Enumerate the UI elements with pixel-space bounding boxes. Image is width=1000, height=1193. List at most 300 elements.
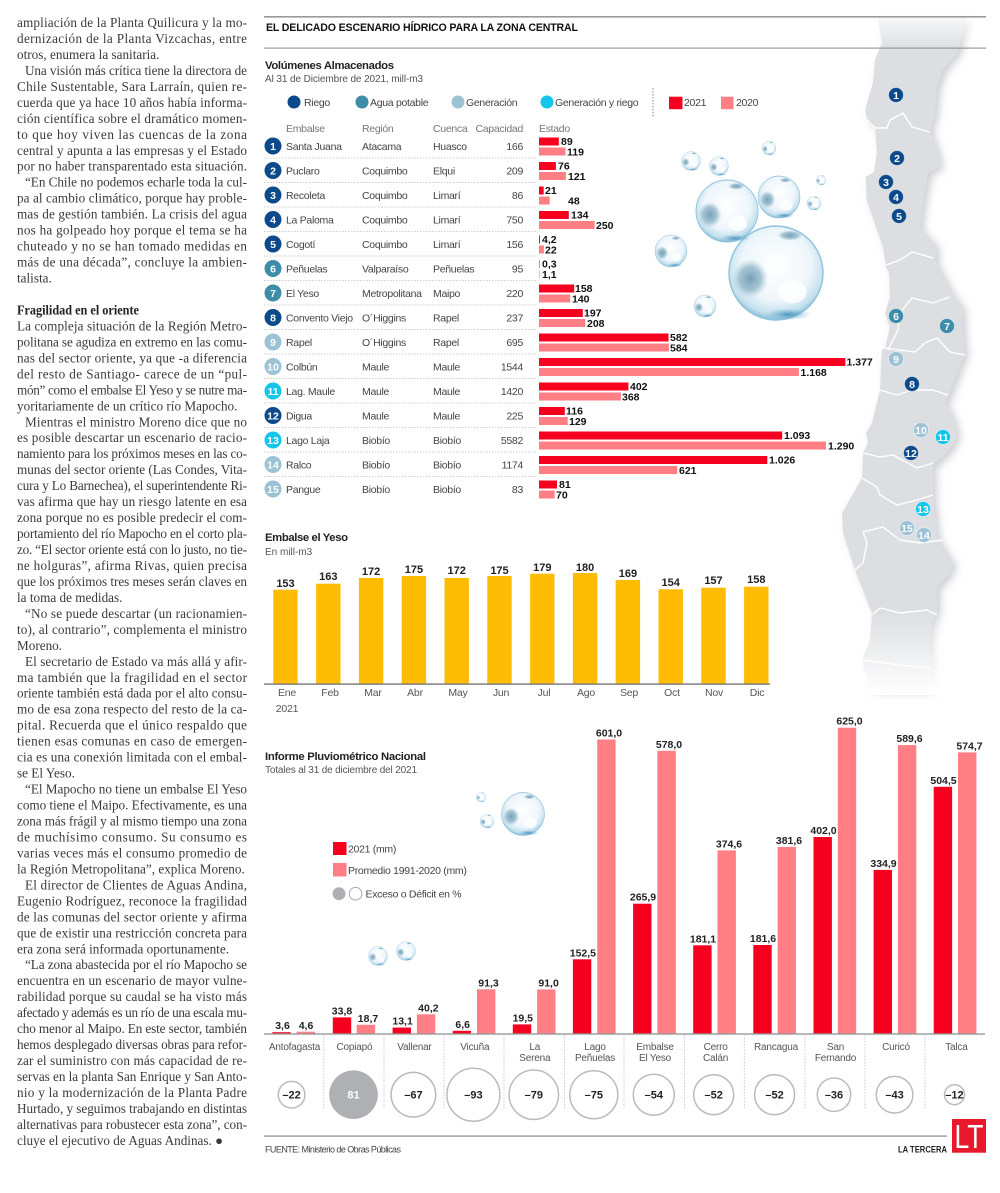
map pins: 10 (915, 425, 927, 437)
map pins: 6 (893, 311, 899, 323)
map pins (878, 88, 954, 542)
legend: reservoir use and year: Riego (304, 97, 330, 109)
values: 157 (704, 575, 723, 587)
station: Curicó: 589,6 (896, 733, 923, 745)
article text column: más de una década”, concluye la ambien- (17, 255, 247, 270)
table row: Recoleta (264, 185, 580, 208)
map silhouette (842, 18, 967, 690)
month labels: Ene (278, 687, 296, 699)
table row: Ralco: Biobío (362, 460, 390, 472)
station: Copiapó: 81 (347, 1090, 360, 1102)
table row: Cogotí: Coquimbo (362, 239, 408, 251)
legend: reservoir use and year: Generación (466, 97, 518, 109)
legend: rainfall (332, 842, 467, 900)
table row: La Paloma: 134 (571, 210, 589, 222)
station: Cerro Calán: 374,6 (716, 838, 742, 850)
table row: Pangue: 81 (559, 479, 571, 491)
table row: Recoleta: Limarí (433, 190, 461, 202)
month labels: Abr (407, 687, 424, 699)
article text column: mo de esa zona respecto del resto de la ca- (17, 702, 247, 717)
table row: Ralco (264, 454, 795, 477)
legend: rainfall: Exceso o Déficit en % (366, 888, 461, 900)
table row: Colbún: 1.168 (800, 367, 827, 379)
table row: El Yeso: 140 (572, 294, 590, 306)
table row: Lago Laja (264, 430, 854, 452)
article text column: encuentra en un escenario de mayor vulne- (17, 973, 247, 988)
table row: Lag. Maule: 368 (622, 392, 640, 404)
region borders (855, 113, 965, 668)
table row: Santa Juana (264, 136, 584, 158)
station: Copiapó: Copiapó (336, 1042, 373, 1053)
article text column: pa al cambio climático, porque hay proble- (17, 191, 247, 206)
article text column: cluye el ejecutivo de Aguas Andinas. ● (17, 1133, 223, 1148)
station: Lago Peñuelas: Lago (584, 1042, 606, 1053)
station: La Serena (509, 977, 559, 1119)
station: Lago Peñuelas: 601,0 (596, 728, 622, 740)
station: Curicó: 334,9 (870, 858, 897, 870)
values: 169 (619, 568, 637, 580)
table row: El Yeso: 7 (270, 288, 276, 300)
table row: La Paloma: La Paloma (286, 214, 334, 226)
station: Embalse El Yeso: Embalse (636, 1042, 674, 1053)
table row: La Paloma: Limarí (433, 214, 461, 226)
article text column: se El Yeso. (17, 766, 75, 781)
table row: Pangue: 83 (512, 484, 523, 496)
article text column: cia es una conexión limitada con el embal- (17, 750, 247, 765)
article text column: la Región Metropolitana”, explica Moreno. (17, 861, 245, 876)
station: Lago Peñuelas: –75 (585, 1090, 603, 1102)
map pins: 11 (937, 432, 949, 444)
table row: El Yeso: Maipo (433, 288, 461, 300)
article text column: por no haber transparentado esta situación. (17, 159, 247, 174)
heading: rainfall: Totales al 31 de diciembre del 2021 (265, 765, 417, 776)
table row: Colbún: 1.377 (846, 356, 873, 368)
table row: Cogotí (264, 234, 557, 256)
article text column: zar el suministro con más capacidad de re- (17, 1053, 247, 1068)
legend: reservoir use and year: Generación y riego (555, 97, 639, 109)
values: 172 (362, 566, 380, 578)
station: Talca: 574,7 (956, 740, 983, 752)
table row: Ralco: 14 (267, 460, 279, 472)
table row: Convento Viejo: 197 (584, 308, 602, 320)
table row: Recoleta: Recoleta (286, 190, 326, 202)
table row: Ralco: 621 (679, 465, 697, 477)
station: La Serena: La (529, 1042, 541, 1053)
station: Antofagasta (269, 1020, 321, 1108)
station: Cerro Calán: 181,1 (690, 933, 716, 945)
table row: Convento Viejo (264, 308, 605, 330)
table row: Peñuelas: Valparaíso (362, 264, 409, 276)
article text column: “En Chile no podemos echarle toda la cul- (25, 175, 247, 190)
station: Talca: Talca (945, 1042, 968, 1053)
station: Embalse El Yeso: El Yeso (639, 1053, 672, 1064)
values: 154 (662, 577, 681, 589)
article text column: “La zona abastecida por el río Mapocho se (25, 957, 247, 972)
station: Vicuña: 91,3 (478, 977, 499, 989)
table row: Colbún (264, 356, 873, 379)
table row: Convento Viejo: Convento Viejo (286, 312, 353, 324)
article text column: rabilidad porque su caudal se ha visto más (17, 989, 247, 1004)
heading: volumes: Volúmenes Almacenados (265, 60, 394, 72)
table row: Digua: 12 (267, 410, 279, 422)
article text column: El director de Clientes de Aguas Andina, (25, 877, 247, 892)
article text column: Eugenio Rodríguez, reconoce la fragilidad (17, 893, 247, 908)
station: Cerro Calán: Calán (703, 1053, 728, 1064)
panel: stored volumes (264, 60, 873, 502)
legend: rainfall: 2021 (mm) (348, 844, 396, 856)
article text column: dernización de la Planta Vizcachas, entre (17, 31, 247, 46)
values: 180 (576, 562, 594, 574)
table row: Rapel: 9 (270, 337, 276, 349)
station: Vallenar: Vallenar (397, 1042, 432, 1053)
table row: Peñuelas: 1,1 (542, 269, 557, 281)
table row: Ralco: 1174 (502, 460, 523, 472)
article text column: zona más frágil y al mismo tiempo una zona (17, 814, 247, 828)
map pins: 1 (893, 90, 899, 102)
month labels: Nov (705, 687, 724, 699)
heading: Embalse el Yeso: En mill-m3 (265, 547, 313, 558)
month labels: Dic (750, 687, 764, 699)
article text column: como tiene el Maipo. Efectivamente, es una (17, 798, 247, 812)
legend: reservoir use and year (288, 88, 759, 117)
article text column: nio y la modernización de la Planta Padre (17, 1085, 247, 1100)
table row: Lag. Maule: 11 (267, 386, 279, 398)
article text column: alternativas para robustecer esta zona”, con- (17, 1117, 247, 1132)
table row: La Paloma: 4 (270, 214, 276, 226)
station: San Fernando: Fernando (815, 1053, 857, 1064)
table row: Lago Laja: 1.093 (784, 430, 810, 442)
table row: Lag. Maule: 1420 (501, 386, 523, 398)
map pins: 2 (894, 153, 900, 165)
article text column: otros, enumera la sanitaria. (17, 47, 159, 62)
table row: Convento Viejo: O´Higgins (362, 312, 406, 324)
bars: monthly volume (273, 573, 768, 684)
table row: Puclaro: 209 (506, 166, 523, 178)
station: San Fernando (810, 716, 863, 1111)
station: Talca: 504,5 (930, 775, 957, 787)
table header (286, 123, 570, 135)
article text column: que los próximos tres meses serán claves en (17, 574, 247, 589)
station: Rancagua: 381,6 (776, 835, 802, 847)
article text column: Hurtado, y seguimos trabajando en distintas (17, 1101, 247, 1116)
table row: Digua: 129 (569, 416, 587, 428)
values: 172 (448, 565, 466, 577)
table row: Lag. Maule: Maule (362, 386, 390, 398)
legend: reservoir use and year: 2020 (736, 97, 759, 109)
table row: Pangue: 70 (556, 490, 568, 502)
article text column: varias veces más el consumo promedio de (17, 845, 247, 860)
station: Antofagasta: 4,6 (299, 1020, 313, 1032)
station: La Serena: 91,0 (538, 977, 559, 989)
table header: Estado (539, 123, 570, 135)
station: Vallenar: 13,1 (392, 1016, 413, 1028)
station: San Fernando: San (827, 1042, 844, 1053)
table row: Rapel (264, 332, 688, 354)
table row: Convento Viejo: 8 (270, 312, 276, 324)
logo: LT: LT (954, 1118, 984, 1155)
table row: Colbún: Maule (362, 362, 390, 374)
table row: Pangue: Biobío (433, 484, 461, 496)
table row: El Yeso: Metropolitana (362, 288, 422, 300)
values: 158 (747, 574, 765, 586)
table row: Lago Laja: Biobío (433, 435, 461, 447)
station: Vicuña: 6,6 (455, 1019, 470, 1031)
table row: Peñuelas: Peñuelas (286, 264, 327, 276)
map pins: 14 (918, 530, 930, 542)
table row: Rapel: 584 (670, 342, 688, 354)
table row: Pangue: Biobío (362, 484, 390, 496)
station: Talca (930, 740, 983, 1105)
station: Cerro Calán: Cerro (704, 1042, 728, 1053)
table row: Lag. Maule: 402 (630, 381, 648, 393)
station: San Fernando: –36 (825, 1090, 843, 1102)
station: La Serena: Serena (519, 1053, 551, 1064)
table header: Capacidad (475, 123, 523, 135)
article text column: oriente también está dada por el alto consu- (17, 686, 247, 701)
article text column: to), al contrario”, complementa el ministro (17, 622, 247, 637)
article text column: la toma de medidas. (17, 590, 122, 605)
table row: Santa Juana: 166 (506, 141, 523, 153)
table row: La Paloma (264, 210, 614, 232)
article text column: zo. “El sector oriente está con lo justo, no tie- (17, 542, 247, 557)
legend: reservoir use and year: Agua potable (370, 97, 429, 109)
map of central Chile with reservoir pins (835, 14, 990, 695)
table row: Rapel: Rapel (286, 337, 312, 349)
article text column: chuteado y no se han tomado medidas en (17, 239, 247, 254)
station: Rancagua (750, 835, 802, 1115)
month labels: May (448, 687, 469, 699)
article text column (17, 15, 248, 1148)
table row: Convento Viejo: 208 (587, 318, 605, 330)
table row: La Paloma: 750 (506, 214, 523, 226)
article text column: Una visión más crítica tiene la directora de (25, 63, 247, 78)
icon: water bubbles near table (655, 141, 826, 320)
table row: Santa Juana: 119 (567, 146, 584, 158)
article text column: ción científica sobre el dramático momen- (17, 111, 247, 126)
station: Rancagua: Rancagua (754, 1042, 799, 1053)
article text column: “El Mapocho no tiene un embalse El Yeso (25, 782, 247, 797)
values: 163 (319, 571, 337, 583)
article text column: vas afirma que hay un riesgo latente en esa (17, 494, 247, 509)
article text column: Fragilidad en el oriente (17, 302, 139, 318)
station: Vicuña: Vicuña (460, 1042, 490, 1053)
map pins: 8 (909, 379, 915, 391)
table row: Cogotí: Cogotí (286, 239, 316, 251)
map pins: 13 (917, 504, 929, 516)
table row: Puclaro: Elqui (433, 166, 455, 178)
table row: Ralco: Biobío (433, 460, 461, 472)
table row: Puclaro: 76 (558, 160, 570, 172)
station: San Fernando: 402,0 (810, 825, 837, 837)
table row: Santa Juana: Santa Juana (286, 141, 342, 153)
heading: Embalse el Yeso (265, 532, 348, 558)
map pins: 15 (901, 523, 913, 535)
table row: Peñuelas: 95 (512, 264, 523, 276)
footer (264, 1118, 986, 1155)
station: Vallenar: –67 (404, 1090, 423, 1102)
table row: Recoleta: 21 (545, 185, 557, 197)
station: Vicuña (447, 977, 500, 1121)
table row: El Yeso (264, 283, 593, 306)
article text column: zona porque no es posible predecir el com- (17, 510, 247, 525)
values: 153 (276, 578, 295, 590)
table header: Cuenca (433, 123, 468, 135)
table row: Rapel: Rapel (433, 337, 459, 349)
title band: EL DELICADO ESCENARIO HÍDRICO PARA LA ZONA CENTRAL (266, 21, 579, 34)
heading: volumes: Al 31 de Diciembre de 2021, mill-m3 (265, 74, 423, 85)
article text column: cho menor al Maipo. En este sector, también (17, 1021, 247, 1036)
article text column: era zona será informada oportunamente. (17, 941, 229, 956)
article text column: ampliación de la Planta Quilicura y la mo- (17, 15, 247, 30)
icon: water bubbles near legend (368, 792, 544, 966)
table row: Santa Juana: Atacama (362, 141, 402, 153)
map pins: 9 (893, 354, 899, 366)
table row: Cogotí: Limarí (433, 239, 461, 251)
article text column: munas del sector oriente (Las Condes, Vita- (17, 462, 247, 477)
table row: Pangue: Pangue (286, 484, 321, 496)
station: Talca: –12 (945, 1090, 964, 1102)
article text column: politana se agudiza en extremo en las comu- (17, 334, 247, 349)
article text column: Chile Sustentable, Sara Larraín, quien re- (17, 79, 247, 94)
heading: rainfall (265, 751, 426, 776)
table row: Digua: Maule (433, 410, 461, 422)
panel: Embalse el Yeso bar chart (264, 532, 770, 715)
map pins: 7 (944, 321, 950, 333)
station: Cerro Calán (690, 838, 742, 1115)
station: Lago Peñuelas: Peñuelas (575, 1053, 615, 1064)
article text column: de muchísimo consumo. Su consumo es (17, 830, 247, 844)
article text column: El secretario de Estado va más allá y afir- (25, 654, 247, 669)
article text column: Moreno. (17, 638, 62, 653)
station: Vallenar (391, 1002, 439, 1117)
article text column: es posible descartar un escenario de racio- (17, 430, 247, 445)
table row: Recoleta: Coquimbo (362, 190, 408, 202)
month labels (276, 687, 764, 715)
table row: Digua (264, 406, 587, 428)
station: La Serena: –79 (525, 1090, 543, 1102)
article text column: de las comunas del sector oriente y afirma (17, 909, 247, 924)
table row: Recoleta: 3 (270, 190, 276, 202)
table row: Peñuelas: 6 (270, 264, 276, 276)
station: Embalse El Yeso: –54 (645, 1090, 664, 1102)
table header: Embalse (286, 123, 325, 135)
table row: El Yeso: 158 (575, 283, 593, 295)
panel: rainfall report (264, 716, 985, 1121)
table row: Colbún: Maule (433, 362, 461, 374)
article text column: ma también que la fragilidad en el sector (17, 670, 248, 685)
month labels: Sep (620, 687, 638, 699)
table row: Recoleta: 48 (568, 196, 580, 208)
article text column: món” como el embalse El Yeso y se nutre ma- (17, 382, 247, 397)
article text column: portamiento del río Mapocho en el corto pla- (17, 526, 247, 541)
map pins: 12 (905, 448, 917, 460)
table row: Puclaro: 121 (568, 171, 586, 183)
table row: Pangue (264, 479, 571, 502)
table row: Santa Juana: 89 (561, 136, 573, 148)
article text column: nos ha golpeado hoy porque el tema se ha (17, 223, 247, 238)
table row: Rapel: 582 (670, 332, 688, 344)
table row: Recoleta: 86 (512, 190, 523, 202)
table row: Cogotí: 156 (506, 239, 523, 251)
table row: Cogotí: 22 (545, 244, 557, 256)
station: Lago Peñuelas (570, 728, 622, 1119)
table row: Rapel: 695 (506, 337, 523, 349)
values (276, 562, 765, 590)
station: Copiapó: 33,8 (332, 1005, 352, 1017)
map pins: 5 (896, 211, 902, 223)
month labels: Feb (321, 687, 339, 699)
map pins: 3 (883, 177, 889, 189)
table row: Colbún: 1544 (501, 362, 523, 374)
month labels: Jun (493, 687, 510, 699)
table row: Digua: Digua (286, 410, 312, 422)
month labels: Ago (577, 687, 595, 699)
station: Curicó: Curicó (882, 1042, 910, 1053)
column separators (324, 1035, 925, 1110)
station: Copiapó: 18,7 (358, 1013, 378, 1025)
article text column: afectado y además es un río de una escala mu- (17, 1005, 247, 1020)
article text column: La compleja situación de la Región Metro- (17, 318, 247, 333)
month labels: Jul (538, 687, 550, 699)
heading: volumes (265, 60, 423, 85)
table row: Lag. Maule (264, 381, 648, 404)
table row: El Yeso: El Yeso (286, 288, 319, 300)
table row: Puclaro: Puclaro (286, 166, 320, 178)
table row: Puclaro (264, 160, 586, 183)
heading: Embalse el Yeso: Embalse el Yeso (265, 532, 348, 544)
article text column: mas de gestión también. La crisis del agua (17, 207, 247, 222)
month labels: Mar (364, 687, 382, 699)
table row: Lago Laja: Lago Laja (286, 435, 330, 447)
station: Copiapó (329, 1005, 378, 1119)
table row: Peñuelas (264, 258, 557, 281)
table row: Digua: 116 (566, 406, 583, 418)
station: Antofagasta: 3,6 (275, 1020, 290, 1032)
legend: rainfall: Promedio 1991-2020 (mm) (348, 865, 467, 877)
article text column: namiento para los próximos meses en las co- (17, 446, 247, 461)
brand name: LA TERCERA (898, 1144, 947, 1154)
month labels: Oct (664, 687, 680, 699)
table row: Cogotí: 4,2 (542, 234, 557, 246)
table row: Ralco: Ralco (286, 460, 312, 472)
table header: Región (362, 123, 394, 135)
station: Antofagasta: –22 (282, 1090, 301, 1102)
article text column: yoritariamente de un crítico río Mapocho. (17, 398, 237, 413)
values: 175 (490, 565, 509, 577)
table row: Puclaro: 2 (270, 166, 276, 178)
values: 175 (405, 564, 423, 576)
article text column: central y apunta a las empresas y el Estado (17, 143, 247, 158)
station: Lago Peñuelas: 152,5 (570, 947, 596, 959)
source note: FUENTE: Ministerio de Obras Públicas (265, 1144, 402, 1154)
legend: reservoir use and year: 2021 (684, 97, 707, 109)
table row: Santa Juana: Huasco (433, 141, 467, 153)
table row: Lago Laja: 1.290 (828, 440, 854, 452)
table row: Colbún: Colbún (286, 362, 318, 374)
station: Rancagua: –52 (765, 1090, 784, 1102)
table row: Peñuelas: Peñuelas (433, 264, 474, 276)
table row: El Yeso: 220 (506, 288, 523, 300)
table row: Colbún: 10 (267, 362, 279, 374)
article text column: to que hoy viven las cuencas de la zona (17, 127, 247, 142)
table row: Ralco: 1.026 (769, 454, 795, 466)
article text column: hemos desplegado diversas obras para refor- (17, 1037, 247, 1052)
table row: Digua: Maule (362, 410, 390, 422)
station: San Fernando: 625,0 (836, 716, 863, 728)
article text column: tienen esas comunas en caso de emergen- (17, 734, 247, 749)
station: Rancagua: 181,6 (750, 933, 776, 945)
station: Curicó (870, 733, 923, 1113)
